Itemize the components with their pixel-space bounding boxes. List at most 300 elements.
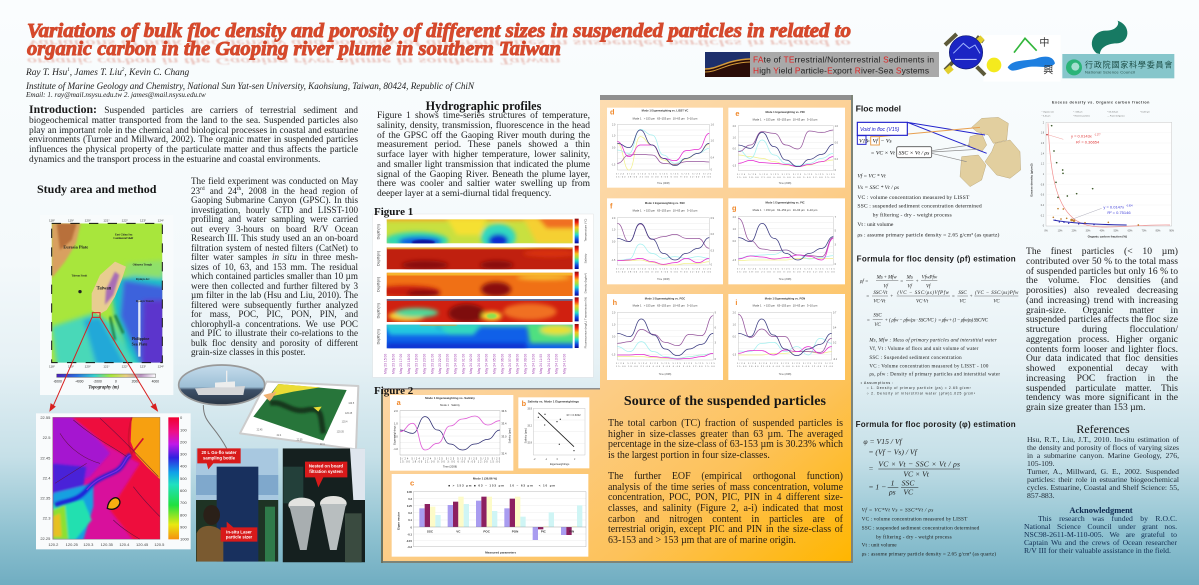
- text: field experiment: Gaoping Submarine Canyon (GPSC). In this: [191, 195, 358, 205]
- chart g: -1.5: [732, 260, 737, 262]
- formula: floc porosity: 1: [891, 478, 894, 487]
- time axis labels: May 24 10:00: [531, 354, 535, 374]
- chart h: -1.5: [611, 355, 616, 357]
- time axis labels: May 24 07:00: [508, 354, 512, 374]
- time axis labels: May 24 06:00: [500, 354, 504, 374]
- text: floc density findings: the volume. Floc densities (and: [1026, 275, 1178, 286]
- chart g: 3: [835, 245, 837, 247]
- chart e: [728, 108, 845, 188]
- text: floc density findings: contributed over 50 % to the total mass: [1026, 256, 1178, 267]
- chart h: [607, 294, 723, 380]
- chart: excess density vs organic carbon fraction: • >153 µm: [1073, 110, 1083, 113]
- text: field experiment: which contained particles smaller than 10 µm: [191, 271, 358, 281]
- chart c: eigenvector bars: 0.1: [408, 518, 413, 522]
- formula: floc porosity: ρs: [888, 488, 896, 497]
- text: introduction: biogeochemical matter transported from the land to the sea. Suspended particles also: [29, 116, 358, 126]
- text: source of the suspended particles: [608, 418, 843, 546]
- text: density definitions: Ms, Mfw : Mass of primary particles and interstitial water: [868, 339, 997, 344]
- text: field experiment: chlorophyll-a concentrations. We use POC: [191, 318, 358, 328]
- chart g: [728, 198, 845, 284]
- text: density definitions: Vf, Vt : Volume of flocs and unit volume of water: [869, 347, 979, 352]
- chart a: eigenweighting vs salinity: 33.4: [501, 422, 507, 426]
- text: source of the suspended particles: terrestrial origin, except PIC and PIN in the size-class of: [608, 524, 843, 535]
- chart: Figure 1 time-depth sections: [373, 214, 593, 377]
- chart h: 1.0: [612, 325, 616, 327]
- chart: Figure 1 time-depth sections: Salinity: [584, 253, 588, 263]
- time axis labels: May 23 19:00: [415, 354, 419, 374]
- chart g: 1.0: [733, 229, 737, 231]
- chart c: eigenvector bars: 0.35: [407, 490, 413, 494]
- time axis labels: May 24 11:00: [539, 354, 543, 374]
- text: introduction: environments (Turner and Millward, 2002). The organic matter in suspended particles: [29, 135, 358, 145]
- formula: floc porosity: VC: [903, 488, 914, 497]
- section: salinity: [386, 247, 573, 270]
- chart i: i: [735, 298, 737, 307]
- text: field experiment: out every 3-hours on board R/V Ocean: [191, 224, 358, 234]
- map: Taiwan topography: 122°: [122, 218, 129, 222]
- formula: floc porosity: SSC: [902, 478, 915, 487]
- photo: filtration system: Nested on board: [309, 464, 343, 469]
- formula: floc density: +: [915, 280, 919, 285]
- chart c: eigenvector bars: Mode 1 (36.86 %): [473, 476, 497, 480]
- text: source of the suspended particles: The total carbon (TC) fraction of suspended particles is: [608, 418, 843, 429]
- text: field experiment: filter water samples in situ in three mesh-: [191, 252, 358, 262]
- text: field experiment: filtered were subsequently further analyzed: [191, 300, 358, 310]
- chart f: 0.9: [711, 218, 715, 220]
- chart g: 5/24 5/24 5/24 5/25 5/25 5/25 5/25 5/25 5/25: [737, 268, 835, 270]
- chart: excess density vs organic carbon fraction: 50%: [1114, 231, 1118, 233]
- chart: excess density vs organic carbon fraction: • 63-153 µm: [1107, 111, 1119, 113]
- map: Taiwan topography: 123°: [140, 218, 147, 222]
- photo: go-flo bottle: sampling bottle: [203, 455, 236, 460]
- formula: floc density: Vf: [907, 284, 912, 289]
- chart c: eigenvector bars: Measured parameters: [485, 550, 517, 554]
- formula: floc density: VC: [874, 323, 881, 328]
- formula: floc density: + ( ρfw − ρfw/ρs · SSC/VC ): [885, 319, 937, 324]
- chart: excess density vs organic carbon fraction: 70%: [1142, 231, 1146, 233]
- text: porosity definitions: by filtering - dry - weight process: [876, 533, 952, 540]
- text: floc model definitions: ρs : assume primary particle density = 2.65 g/cm³ (as quartz): [857, 232, 999, 239]
- time axis labels: May 24 13:00: [555, 354, 559, 374]
- heading: floc model: Floc model: [856, 103, 901, 113]
- text: source of the suspended particles: analysis of the time series of mass concentration, volume: [608, 482, 843, 493]
- text: floc density findings: tendency was more significant in the: [1026, 392, 1178, 403]
- text: floc model definitions: [857, 173, 999, 239]
- text: references: Turner, A., Millward, G. E., 2002. Suspended: [1027, 466, 1179, 476]
- chart a: eigenweighting vs salinity: Eigenweightings: [392, 425, 396, 445]
- chart: Figure 1 time-depth sections: Temperature (°C): [584, 219, 588, 242]
- chart h: Mode 1 > 153 µm 63~153 µm 10~63 µm 3~10 µm: [633, 304, 698, 308]
- label: Figure 1: Figure 1: [374, 206, 413, 218]
- chart d: 2.0: [612, 125, 616, 127]
- text: field experiment: were then collected and further filtered by 3: [191, 280, 358, 290]
- time axis labels: May 23 22:00: [438, 354, 442, 374]
- logo: river emblem: [1008, 34, 1055, 76]
- chart c: eigenvector bars: PIC: [541, 529, 547, 533]
- chart g: Mode 1 > 153 µm 63~153 µm 10~63 µm 3~10 µm: [753, 208, 818, 212]
- text: acknowledgment: National Science Council under grant nos.: [1024, 522, 1177, 531]
- map: Taiwan topography: 124°: [158, 218, 165, 222]
- logo: National Science Council: [1062, 21, 1174, 78]
- chart: excess density vs organic carbon fraction: 1.2: [1041, 164, 1045, 166]
- section: temperature: [386, 219, 573, 244]
- diagram: floc model: V15: [859, 139, 868, 145]
- text: floc density findings: structure during flocculation/: [1026, 324, 1178, 335]
- chart e: 0.2: [835, 159, 839, 161]
- text: hydrographic profiles: [377, 111, 590, 199]
- chart: excess density vs organic carbon fraction: 0.6: [1041, 195, 1045, 197]
- chart f: 0.0: [612, 241, 616, 243]
- chart: excess density vs organic carbon fraction: 90%: [1169, 231, 1174, 233]
- map: Taiwan topography: -2000: [93, 380, 102, 384]
- chart d: 0.0: [612, 147, 616, 149]
- text: introduction: [29, 102, 358, 165]
- text: floc density findings: showed exponential decay with: [1026, 363, 1178, 374]
- chart f: [607, 198, 723, 284]
- text: floc density findings: aggregation process. Higher organic: [1026, 334, 1178, 345]
- title reflection: [27, 37, 851, 66]
- map: Taiwan topography: Sea Plate: [132, 342, 148, 347]
- chart f: Time (2008): [657, 279, 670, 281]
- chart d: 0: [711, 169, 713, 171]
- text: field experiment: [191, 176, 358, 357]
- text: source of the suspended particles: classes, and salinity (Figure 2, a-i) indicated that most: [608, 503, 843, 514]
- text: source of the suspended particles: 63-153 and > 153 µm that are of marine origin.: [608, 535, 796, 546]
- chart: excess density vs organic carbon fraction: • Organic rate: [1042, 110, 1055, 113]
- chart: excess density vs organic carbon fraction: • 3-10 µm: [1042, 116, 1051, 118]
- chart a: eigenweighting vs salinity: [390, 395, 513, 471]
- title: Variations of bulk floc density and porosity of different sizes in suspended particles in related to: [27, 21, 851, 42]
- formula: floc density: VfwPfw: [922, 275, 938, 280]
- map: Gaoping canyon bathymetry: 600: [180, 488, 187, 493]
- text: floc model definitions: Vf = VC * Vt: [857, 173, 886, 180]
- chart a: eigenweighting vs salinity: Salinity (psu): [508, 428, 512, 443]
- time axis labels: May 24 04:00: [485, 354, 489, 374]
- text: floc density findings: increasing POC fraction in the: [1026, 373, 1178, 384]
- email: Email: 1. ray@mail.nsysu.edu.tw 2. james@mail.nsysu.edu.tw: [26, 91, 206, 99]
- chart b: salinity regression: Salinity (psu): [524, 428, 528, 443]
- chart: excess density vs organic carbon fraction: 1.4: [1041, 153, 1045, 155]
- time axis labels: May 23 18:00: [407, 354, 411, 374]
- chart: excess density vs organic carbon fraction: 10%: [1058, 231, 1062, 233]
- photo: filtration system: filtration system: [309, 469, 343, 474]
- chart f: Mode 1 Eigenweighting vs. SSC: [645, 201, 685, 205]
- chart b: salinity regression: -1: [545, 459, 548, 461]
- chart a: eigenweighting vs salinity: 0.0: [394, 434, 398, 438]
- chart h: 9: [715, 313, 717, 315]
- diagram: floc model: =: [867, 139, 870, 145]
- map: Taiwan topography: -6000: [53, 380, 62, 384]
- text: source of the suspended particles: carbon and nitrogen content in particles are of: [608, 514, 843, 525]
- text: field experiment: µm filter in the lab (Hsu and Liu, 2010). The: [191, 290, 358, 300]
- text: field experiment: Research III. This study used an an on-board: [191, 233, 358, 243]
- chart: excess density vs organic carbon fraction: 0.2: [1041, 215, 1045, 217]
- formula: floc density: =: [900, 280, 903, 285]
- map: Gaoping canyon bathymetry: 120.3: [83, 542, 94, 547]
- chart g: Time (2008): [779, 279, 791, 281]
- chart: Figure 1 time-depth sections: Transmission (%): [584, 297, 588, 320]
- chart a: eigenweighting vs salinity: 5/24 5/24 5/24 5/25 5/25 5/25 5/25 5/25 5/25: [400, 458, 501, 460]
- chart c: eigenvector bars: [392, 474, 588, 557]
- photo: go-flo bottle: [196, 448, 278, 562]
- connector: ship to photo: [203, 405, 227, 448]
- time axis labels: May 23 17:00: [399, 354, 403, 374]
- chart h: 0.0: [612, 337, 616, 339]
- image: 3D terrain card: 22.4: [277, 435, 282, 437]
- map: Taiwan topography: -4000: [75, 380, 84, 384]
- formula: floc porosity: = (Vf − Vs) / Vf: [868, 447, 919, 456]
- chart a: eigenweighting vs salinity: Mode 1 Eigenweighting vs. Salinity: [425, 396, 475, 400]
- chart: excess density vs organic carbon fraction: 30%: [1086, 231, 1090, 233]
- text: hydrographic profiles: signal of the Gaoping River. Beneath the plume layer,: [377, 170, 590, 180]
- map: Taiwan topography: 120°: [85, 218, 92, 222]
- map: Taiwan topography: 120°: [85, 364, 92, 368]
- text: field experiment: 23rd and 24th, 2008 in the head region of: [191, 185, 358, 196]
- text: floc density findings: [1026, 246, 1178, 413]
- chart i: -1.5: [732, 355, 737, 357]
- logo: National Science Council: National Science Council: [1085, 69, 1135, 74]
- text: acknowledgment: [1024, 514, 1177, 555]
- chart f: 5/24 5/24 5/24 5/25 5/25 5/25 5/25 5/25 5/25: [616, 268, 712, 270]
- map: Taiwan topography: 118°: [49, 364, 56, 368]
- map: Gaoping canyon bathymetry: 22.55: [40, 415, 51, 420]
- time axis labels: May 24 12:00: [547, 354, 551, 374]
- formula: floc porosity: = 1 −: [868, 482, 886, 491]
- chart i: 5/24 5/24 5/24 5/25 5/25 5/25 5/25 5/25 5/25: [737, 363, 834, 365]
- image: 3D terrain card: 120.5: [348, 403, 355, 405]
- image: 3D terrain card: [240, 382, 358, 449]
- formula: floc density: VC: [959, 300, 966, 305]
- text: references: the density and porosity of flocs of varying sizes: [1027, 442, 1179, 452]
- chart e: 5/24 5/24 5/24 5/25 5/25 5/25 5/25 5/25 5/25: [737, 174, 835, 176]
- time axis labels: May 24 03:00: [477, 354, 481, 374]
- formula: floc density: Ms + Mfw: [876, 275, 897, 280]
- map: Taiwan topography: 118°: [49, 218, 56, 222]
- chart: Figure 1 time-depth sections: Fluorescence (mg/L): [584, 321, 588, 348]
- chart h: Mode 1 Eigenweighting vs. POC: [645, 296, 685, 300]
- chart f: Mode 1 > 153 µm 63~153 µm 10~63 µm 3~10 µm: [633, 209, 698, 213]
- text: hydrographic profiles: there was cooler and saltier water swelling up from: [377, 179, 590, 189]
- chart f: -1.5: [611, 260, 616, 262]
- text: introduction: influences the physical property of the particulate matter and thus affects the particle: [29, 145, 358, 155]
- chart b: salinity regression: b: [522, 399, 527, 408]
- text: field experiment: grain-size classes in this poster.: [191, 347, 305, 357]
- heading: hydrographic profiles: Hydrographic profiles: [426, 99, 541, 113]
- chart d: 15:00 18:00 21:00 0:00 3:00 6:00 9:00 12:00 15:00: [616, 176, 712, 178]
- text: density definitions: • Assumptions :: [861, 381, 893, 385]
- chart i: Time (2008): [779, 374, 791, 376]
- formula: floc density: (VC − SSC/ρs)VfPfw: [897, 291, 950, 296]
- map: Taiwan topography: 121°: [103, 218, 110, 222]
- map: Taiwan topography: 123°: [140, 364, 147, 368]
- logo: National Science Council: 行政院國家科學委員會: [1085, 59, 1172, 70]
- map: Taiwan topography: Eurasia Plate: [63, 244, 88, 249]
- map: Taiwan topography: 124°: [158, 364, 165, 368]
- chart: Figure 1 time-depth sections: Depth(m): [376, 277, 380, 292]
- map: Gaoping canyon bathymetry: 22.4: [43, 475, 51, 480]
- formula: floc porosity: VC × Vt: [903, 470, 930, 479]
- text: density definitions: ○ 2. Density of interstitial water (ρfw)1.025 g/cm³: [867, 392, 976, 396]
- map: Taiwan topography: 119°: [68, 364, 75, 368]
- text: porosity definitions: ρs : assume primary particle density = 2.65 g/cm³ (as quartz): [862, 551, 996, 558]
- map: Gaoping canyon bathymetry: 500: [180, 476, 187, 481]
- image: 3D terrain card: 120.4: [342, 422, 348, 424]
- map: Taiwan topography: 2000: [132, 380, 139, 384]
- title: [26, 21, 851, 66]
- time axis labels: May 24 02:00: [469, 354, 473, 374]
- map: Taiwan topography: 122°: [122, 364, 129, 368]
- map: Taiwan topography: Ryukyu Trench: [136, 300, 154, 303]
- chart c: eigenvector bars: 0.2: [408, 511, 413, 515]
- time axis labels: May 23 16:00: [391, 354, 395, 374]
- map: Taiwan topography: 119°: [68, 218, 75, 222]
- map: Taiwan topography: Okinawa Trough: [133, 263, 152, 266]
- chart d: -1.5: [611, 165, 616, 167]
- text: floc density findings: suspended particulate matter. This: [1026, 383, 1178, 394]
- formula: floc density: = ρfw + (1 − ρfw/ρs) SSC/VC: [938, 319, 989, 324]
- chart e: Mode 1 > 153 µm 63~153 µm 10~63 µm 3~10 µm: [753, 117, 818, 121]
- text: references: [1027, 434, 1179, 500]
- map: Taiwan topography: Ryukyu Arc: [136, 278, 150, 281]
- text: field experiment: profiling and water sampling were carried: [191, 214, 358, 224]
- chart h: 2.0: [612, 313, 616, 315]
- map: Gaoping canyon bathymetry: 0: [180, 415, 183, 420]
- text: hydrographic profiles: of the GPSC off the Gaoping River mouth during the: [377, 130, 590, 140]
- time axis labels: May 24 00:00: [454, 354, 458, 374]
- map: Taiwan topography: Continental Shelf: [113, 237, 133, 240]
- chart a: eigenweighting vs salinity: 1.0: [394, 422, 398, 426]
- map: Gaoping canyon bathymetry: 120.45: [136, 542, 149, 547]
- text: porosity definitions: [862, 507, 996, 558]
- chart g: Mode 1 Eigenweighting vs. PIC: [765, 200, 805, 204]
- map: Gaoping canyon bathymetry: 1000: [180, 536, 190, 541]
- time axis labels: May 24 09:00: [524, 354, 528, 374]
- map: Gaoping canyon bathymetry: 900: [180, 524, 187, 529]
- chart e: 15:00 18:00 21:00 0:00 3:00 6:00 9:00 12:00 15:00: [737, 177, 835, 179]
- formula: floc density: [859, 275, 1019, 328]
- photo: go-flo bottle: In-situ Laser: [226, 529, 252, 534]
- time axis labels: May 24 14:00: [562, 354, 566, 374]
- map: Gaoping canyon bathymetry: [36, 413, 191, 549]
- chart: excess density vs organic carbon fraction: 0%: [1044, 231, 1048, 233]
- text: introduction: dynamics and the transport process in the estuarine and coastal environments.: [29, 155, 320, 165]
- arrow: zoom right: [100, 317, 157, 411]
- chart: excess density vs organic carbon fraction: 80%: [1156, 231, 1160, 233]
- chart b: salinity regression: 33.2: [527, 426, 533, 428]
- heading: study area and method: Study area and method: [37, 182, 156, 196]
- logo: marine geology emblem: [944, 34, 1061, 82]
- chart c: eigenvector bars: 0: [411, 525, 413, 529]
- formula: floc density: ρf =: [859, 280, 868, 285]
- logo: FATES banner: FAte of TErrestrial/Nonterrestrial Sediments in: [753, 54, 934, 64]
- chart: excess density vs organic carbon fraction: -1.277: [1094, 135, 1101, 137]
- chart c: eigenvector bars: -0.2: [407, 545, 413, 549]
- time axis labels: May 23 21:00: [430, 354, 434, 374]
- section: fluorescence: [386, 324, 573, 348]
- chart f: 0.3: [711, 251, 715, 253]
- chart: excess density vs organic carbon fraction: 1.8: [1041, 133, 1045, 135]
- text: floc model definitions: Vt : unit volume: [857, 222, 894, 228]
- chart: excess density vs organic carbon fraction: 2: [1043, 122, 1045, 124]
- figures: study area maps and photos: [36, 218, 365, 562]
- chart e: 1.0: [733, 137, 737, 139]
- text: field experiment: filtration system of nested filters (CatNet) to: [191, 242, 358, 252]
- formula: floc density: SSC: [958, 291, 967, 296]
- text: floc density findings: grain size greater than 153 µm.: [1026, 402, 1146, 413]
- authors: Ray T. Hsu1, James T. Liu2, Kevin C. Chang: [26, 68, 189, 78]
- chart b: salinity regression: 2: [574, 459, 576, 461]
- chart d: 1.0: [711, 141, 715, 143]
- text: floc density findings: suspended particles affects the floc size: [1026, 314, 1178, 325]
- chart a: eigenweighting vs salinity: 2.0: [394, 409, 398, 413]
- chart a: eigenweighting vs salinity: 33.6: [501, 409, 507, 413]
- chart e: -1.5: [732, 165, 737, 167]
- diagram: floc model: = VC × Vt −: [871, 150, 900, 156]
- map: Gaoping canyon bathymetry: 700: [180, 500, 187, 505]
- chart: Figure 1 time-depth sections: Depth(m): [376, 303, 380, 318]
- chart: excess density vs organic carbon fraction: 1: [1043, 174, 1045, 176]
- chart h: h: [613, 298, 618, 307]
- chart: excess density vs organic carbon fraction: 1.6: [1041, 143, 1045, 145]
- chart e: 2.0: [733, 126, 737, 128]
- chart b: salinity regression: 0: [557, 459, 559, 461]
- chart f: 2.0: [612, 218, 616, 220]
- affiliation: Institute of Marine Geology and Chemistry, National Sun Yat-sen University, Kaohsiung, Taiwan, 80424, Republic of ChiN: [26, 81, 474, 91]
- formula: floc density: =: [952, 295, 955, 300]
- photo: go-flo bottle: 20 L Go-flo water: [201, 450, 237, 455]
- formula: floc density: SSC·Vt: [873, 291, 888, 296]
- text: hydrographic profiles: surface layer with higher temperature, lower salinity,: [377, 150, 590, 160]
- chart i: 0.2: [833, 342, 837, 344]
- chart: excess density vs organic carbon fraction: — Power (Organic): [1107, 116, 1125, 118]
- text: porosity definitions: VC : volume concentration measured by LISST: [862, 517, 968, 523]
- map: Gaoping canyon bathymetry: 400: [180, 464, 187, 469]
- chart: excess density vs organic carbon fraction: 0.8: [1041, 184, 1045, 186]
- text: acknowledgment: This research was funded by R.O.C.: [1038, 514, 1177, 523]
- chart e: 0: [835, 170, 837, 172]
- chart i: 1.0: [733, 325, 737, 327]
- formula: floc porosity: φ = V15 / Vf: [863, 437, 904, 446]
- figures 1 and 2a-c: [372, 214, 594, 557]
- chart h: 0: [715, 359, 717, 361]
- chart c: eigenvector bars: -0.1: [407, 532, 413, 536]
- map: Taiwan topography: 4000: [152, 380, 159, 384]
- chart g: 0: [835, 264, 837, 266]
- chart: excess density vs organic carbon fraction: -0.804: [1126, 205, 1133, 207]
- map: Gaoping canyon bathymetry: 300: [180, 451, 187, 456]
- section: transmission: [386, 299, 573, 322]
- text: floc density findings: Our data indicated that floc densities: [1026, 353, 1178, 364]
- column: floc model and formulas: [856, 103, 1021, 558]
- chart: Figure 1 time-depth sections: Density (kg/m³): [584, 273, 588, 293]
- text: density definitions: ○ 1. Density of primary particle (ρs) = 2.65 g/cm³: [867, 386, 972, 390]
- chart: excess density vs organic carbon fraction: y = 0.0143x: [1071, 134, 1092, 139]
- chart b: salinity regression: 32.8: [527, 442, 533, 444]
- chart d: Mode 1 Eigenweighting vs. LISST VC: [642, 109, 688, 113]
- text: floc model definitions: Vs = SSC * Vt / ρs: [857, 185, 900, 191]
- text: field experiment: sizes of 10, 63, and 153 mm. The residual: [191, 262, 358, 272]
- text: acknowledgment: Captain Wu and the crews of Ocean researcher: [1024, 538, 1177, 547]
- logo: FATES banner: [705, 52, 939, 77]
- chart e: Mode 1 Eigenweighting vs. PIN: [765, 110, 805, 114]
- image: 3D terrain card: 22.45: [257, 430, 263, 432]
- chart g: 15:00 18:00 21:00 0:00 3:00 6:00 9:00 12:00 15:00: [737, 271, 835, 273]
- chart b: salinity regression: R² = 0.6332: [567, 413, 581, 417]
- text: floc model definitions: by filtering - dry - weight process: [873, 212, 952, 219]
- text: porosity definitions: Vf = VC*Vt Vs = SSC*Vt / ρs: [862, 507, 933, 514]
- time axis labels: May 24 01:00: [461, 354, 465, 374]
- text: density definitions: ρs, ρfw : Density of primary particles and interstitial water: [869, 373, 1000, 378]
